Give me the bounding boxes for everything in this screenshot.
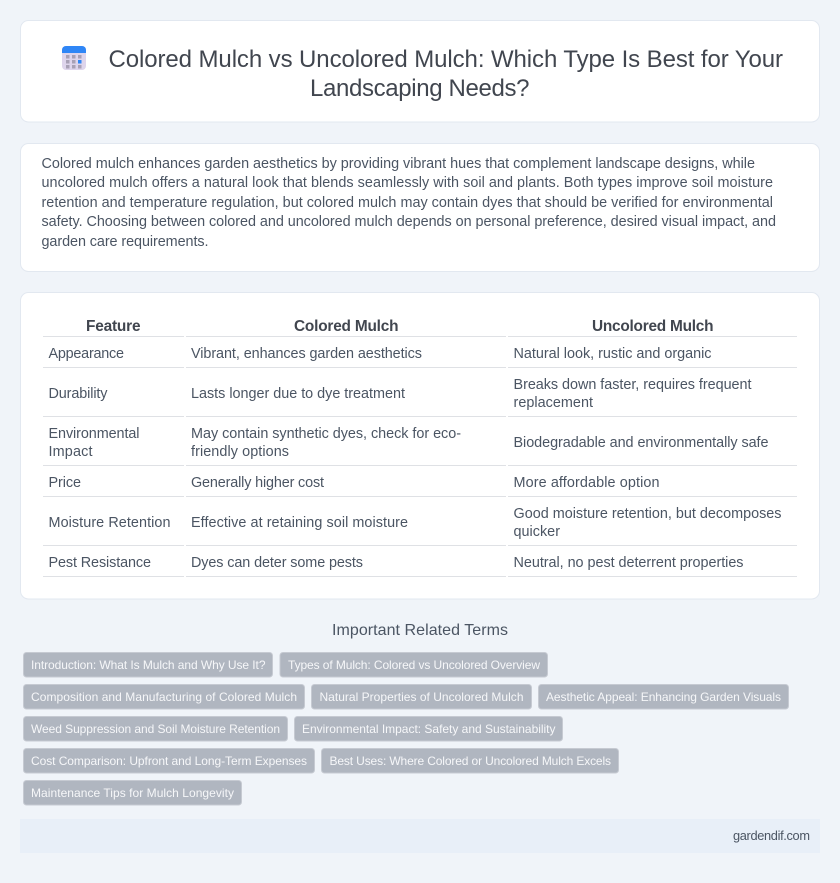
table row: moisture retention: Moisture Retention [48, 515, 170, 531]
text block: summary: retention and temperature regulation, but colored mulch may contain dyes that should be verified for environmental [42, 195, 773, 211]
table header row [86, 318, 714, 335]
tag: Introduction: What Is Mulch and Why Use It? [31, 658, 266, 672]
table row: environmental impact: Environmental [48, 426, 140, 442]
tag [312, 684, 532, 709]
table row: durability: replacement [514, 395, 593, 411]
table row: price: Price [48, 475, 81, 491]
table row: appearance: Natural look, rustic and organic [514, 346, 712, 362]
table row: moisture retention: Good moisture retention, but decomposes [514, 506, 782, 522]
panel: comparison table [20, 292, 820, 599]
table header row: Feature [86, 318, 141, 335]
heading: important related terms: Important Related Terms [332, 622, 508, 639]
tag: Cost Comparison: Upfront and Long-Term Expenses [31, 754, 307, 768]
table row: moisture retention [48, 506, 782, 540]
text block: summary: uncolored mulch offers a natural look that blends seamlessly with soil and plants. Both types improve soil moisture [42, 175, 773, 191]
tag [322, 748, 618, 773]
tag: Best Uses: Where Colored or Uncolored Mulch Excels [330, 754, 611, 768]
title [108, 46, 783, 102]
tag [24, 748, 314, 773]
table row: durability: Breaks down faster, requires frequent [514, 377, 752, 393]
text block: summary [42, 156, 776, 250]
table header row: Colored Mulch [294, 318, 398, 335]
tag: Natural Properties of Uncolored Mulch [320, 690, 524, 704]
tag: Types of Mulch: Colored vs Uncolored Overview [288, 658, 540, 672]
tag [24, 652, 272, 677]
table row: environmental impact: Impact [48, 444, 92, 460]
table row: durability: Durability [48, 386, 108, 402]
table row: price [48, 475, 660, 491]
icon: calendar [62, 46, 86, 70]
title: Landscaping Needs? [310, 75, 530, 102]
panel: header [20, 20, 820, 122]
table header row: Uncolored Mulch [592, 318, 714, 335]
tag [24, 780, 242, 805]
table row: moisture retention: quicker [514, 524, 560, 540]
tag: Aesthetic Appeal: Enhancing Garden Visuals [546, 690, 781, 704]
table row: pest resistance: Neutral, no pest deterrent properties [514, 555, 744, 571]
table row: pest resistance: Pest Resistance [48, 555, 151, 571]
title: Colored Mulch vs Uncolored Mulch: Which Type Is Best for Your [108, 46, 783, 73]
table row: appearance: Appearance [48, 346, 124, 362]
tag [24, 684, 304, 709]
table row: environmental impact: May contain synthetic dyes, check for eco- [191, 426, 461, 442]
table row: environmental impact: friendly options [191, 444, 289, 460]
table row: durability [48, 377, 752, 411]
table row: moisture retention: Effective at retaining soil moisture [191, 515, 408, 531]
tag [24, 716, 288, 741]
tag: Composition and Manufacturing of Colored Mulch [31, 690, 297, 704]
text block: summary: safety. Choosing between colored and uncolored mulch depends on personal preference, desired visual impact, and [42, 214, 776, 230]
text block: summary: Colored mulch enhances garden aesthetics by providing vibrant hues that complement landscape designs, while [42, 156, 755, 172]
tag: Weed Suppression and Soil Moisture Retention [31, 722, 280, 736]
table row: price: More affordable option [514, 475, 660, 491]
table row: environmental impact: Biodegradable and environmentally safe [514, 435, 768, 451]
table row: environmental impact [48, 426, 768, 460]
tag [294, 716, 562, 741]
footer bar [20, 819, 820, 853]
tag: Environmental Impact: Safety and Sustainability [302, 722, 556, 736]
table row: pest resistance [48, 555, 744, 571]
table row: appearance: Vibrant, enhances garden aesthetics [191, 346, 422, 362]
tag [538, 684, 788, 709]
footer bar: gardendif.com [733, 828, 810, 843]
table row: price: Generally higher cost [191, 475, 324, 491]
table row: pest resistance: Dyes can deter some pests [191, 555, 363, 571]
panel: related term tags [24, 652, 788, 805]
tag [280, 652, 548, 677]
panel: summary paragraph [20, 144, 820, 272]
table row: appearance [48, 346, 712, 362]
text block: summary: garden care requirements. [42, 234, 208, 250]
tag: Maintenance Tips for Mulch Longevity [31, 786, 234, 800]
table row: durability: Lasts longer due to dye treatment [191, 386, 405, 402]
